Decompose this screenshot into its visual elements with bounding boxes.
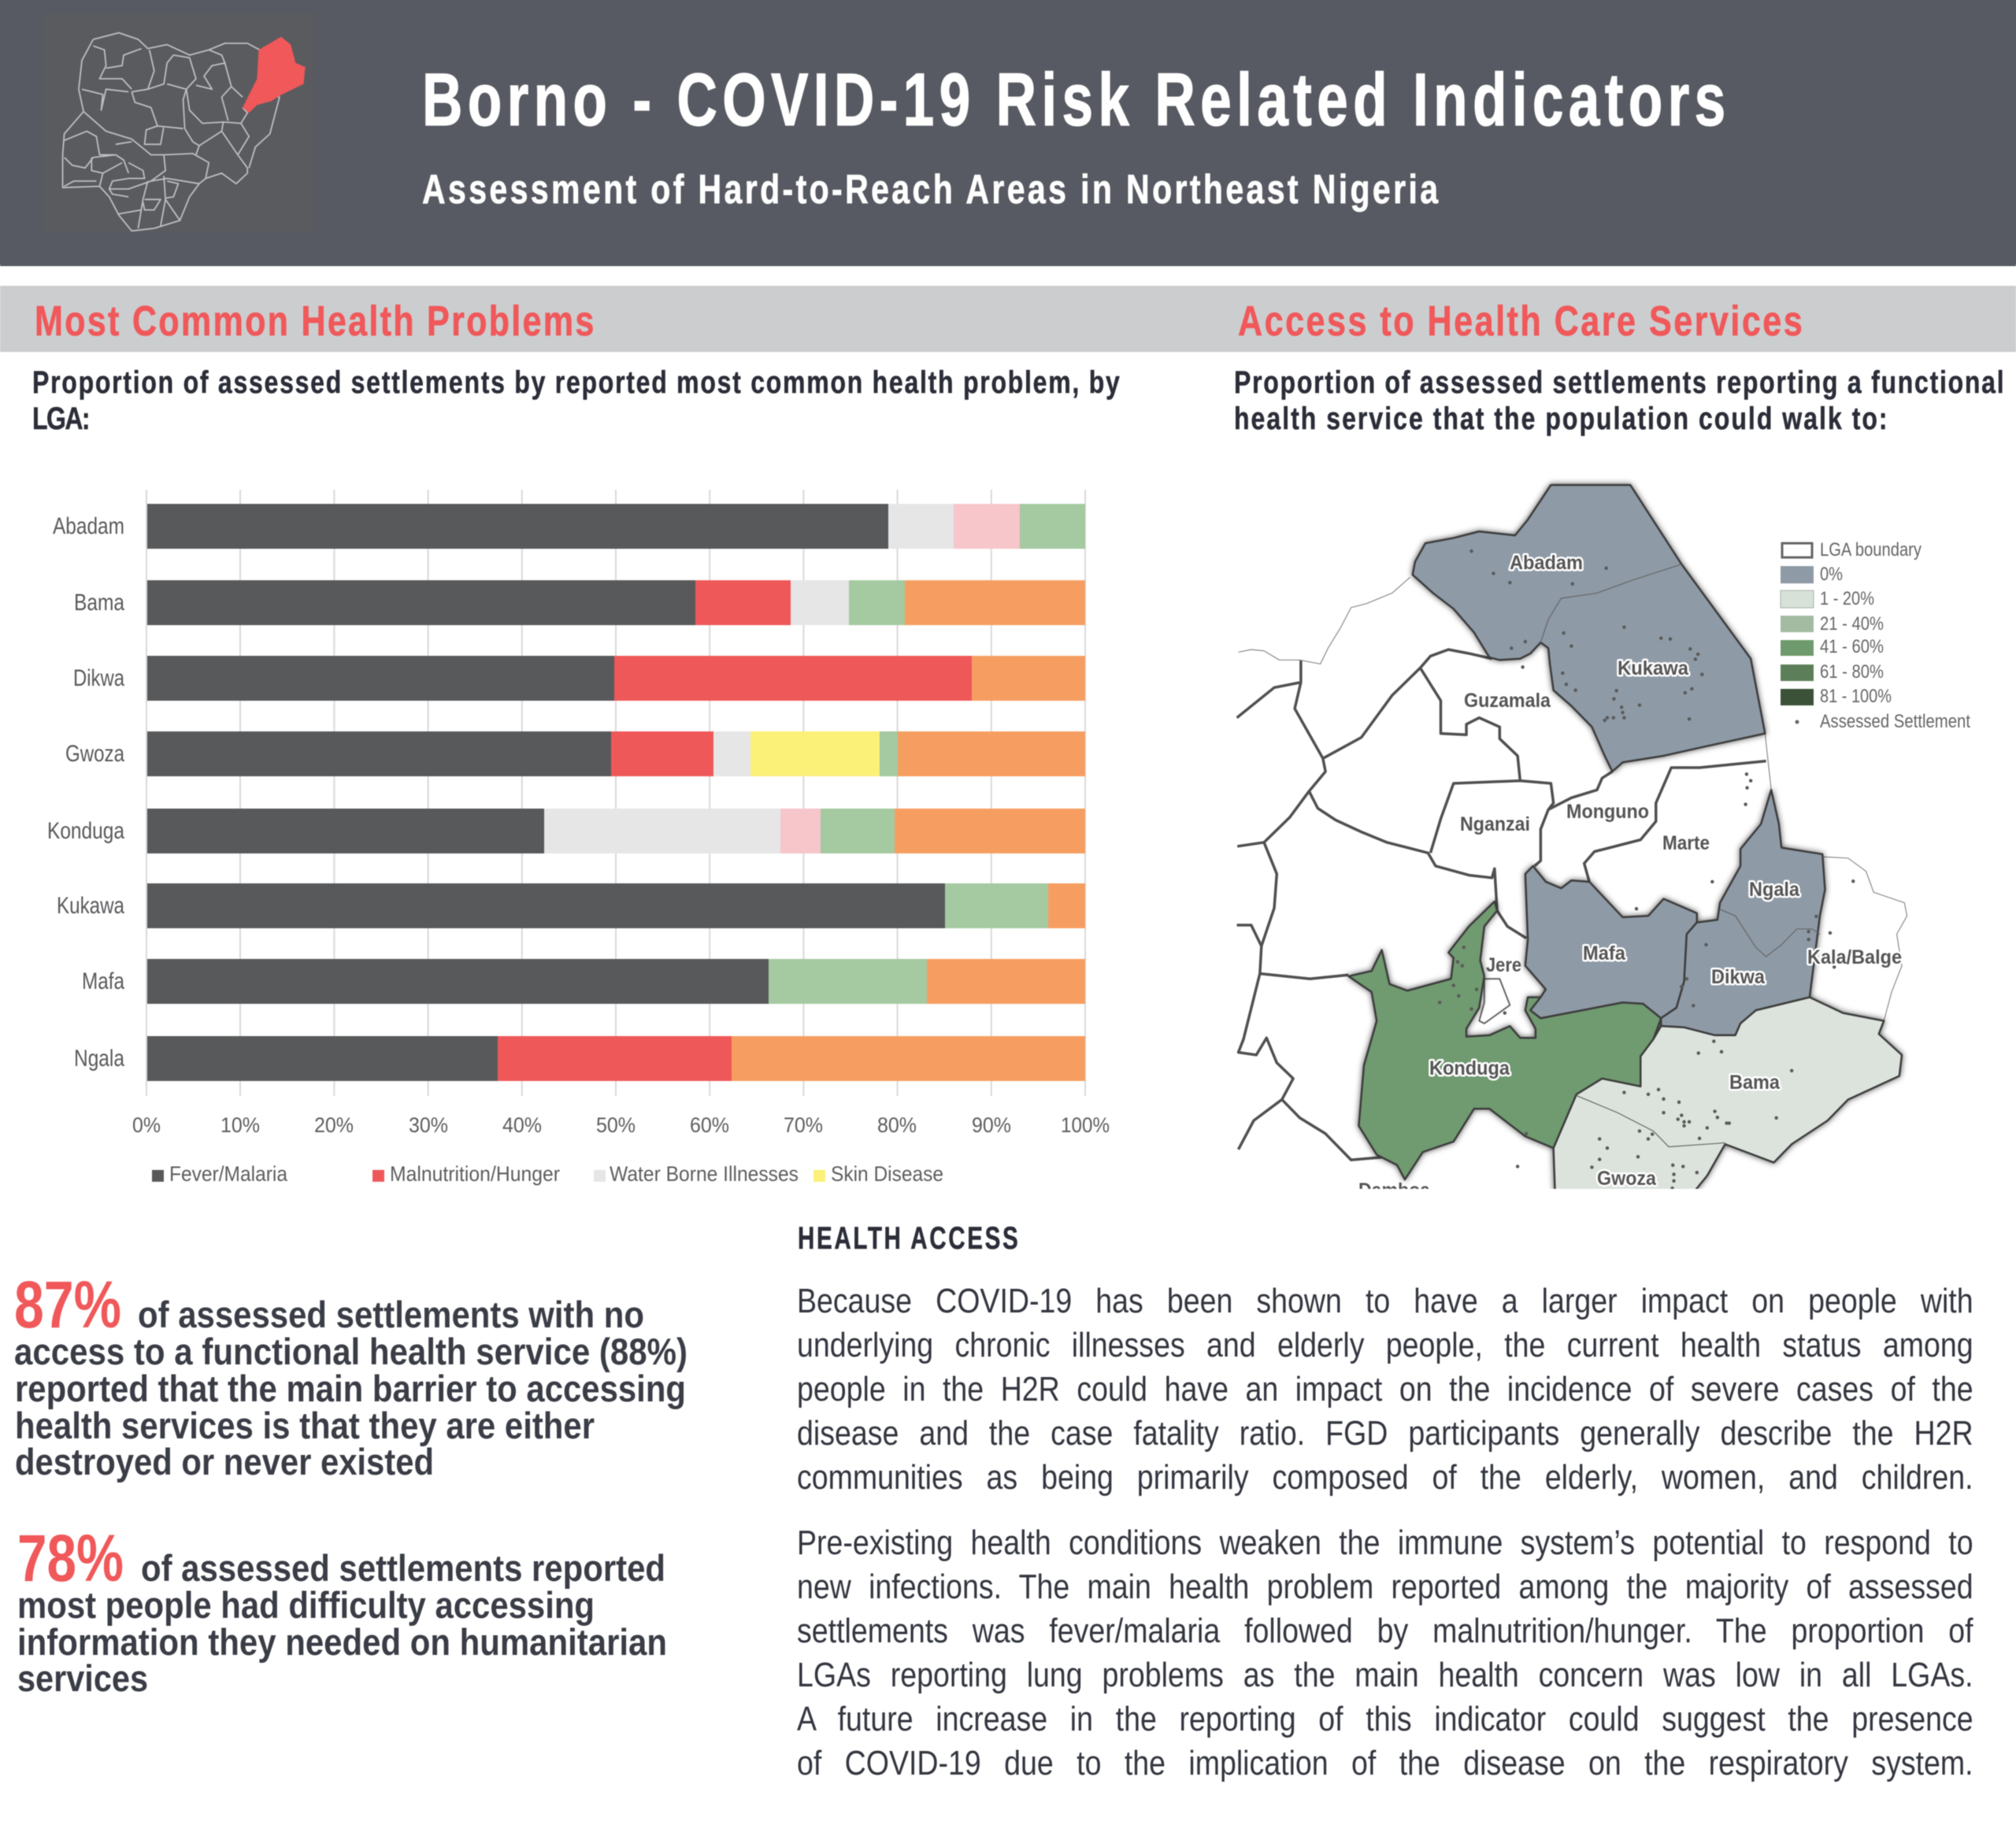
- callout: 78% statistic: information they needed on humanitarian: [17, 1621, 667, 1663]
- chart axis labels: 100%: [1061, 1113, 1110, 1137]
- chart axis labels: 80%: [877, 1113, 917, 1137]
- subtitle: Assessment of Hard-to-Reach Areas in Northeast Nigeria: [422, 166, 1439, 212]
- bar: Abadam: Abadam: [53, 513, 124, 539]
- LGA name labels: Guzamala: [1464, 690, 1551, 712]
- map legend: [1781, 539, 1970, 732]
- bar: Dikwa: [73, 656, 1085, 701]
- text block: health access paragraph 2: new infections. The main health problem reported among the majority of assessed: [797, 1568, 1973, 1606]
- LGA name labels: Konduga: [1429, 1057, 1510, 1079]
- LGA name labels: Kala/Balge: [1807, 946, 1902, 968]
- text block: health access paragraph 2: settlements was fever/malaria followed by malnutrition/hunger. The proportion of: [797, 1612, 1973, 1650]
- bar: Bama: [74, 580, 1085, 625]
- heading: health problems: Most Common Health Problems: [35, 298, 594, 345]
- chart legend: [152, 1162, 943, 1186]
- bar: Abadam: [53, 504, 1085, 549]
- bar: Mafa: [82, 959, 1085, 1004]
- callout: 87% statistic: 87%: [14, 1268, 121, 1342]
- panel: header banner: [0, 0, 2016, 266]
- callout: 87% statistic: of assessed settlements with no: [138, 1294, 644, 1335]
- text block: health access paragraph 1: disease and the case fatality ratio. FGD participants generally describe the H2R: [797, 1414, 1973, 1453]
- text block: health access paragraph 2: A future increase in the reporting of this indicator could suggest the presence: [797, 1700, 1973, 1738]
- LGA fills by access level: [1348, 485, 1902, 1191]
- map legend: LGA boundary: [1820, 539, 1922, 561]
- text block: chart description: [32, 365, 1120, 436]
- callout: 78% statistic: services: [17, 1657, 148, 1699]
- icon: Nigeria map with Borno highlighted: [63, 33, 306, 231]
- chart axis labels: 30%: [409, 1113, 448, 1137]
- map legend: 21 - 40%: [1820, 613, 1884, 635]
- text block: health access paragraph 2: [797, 1523, 1973, 1782]
- chart legend: Malnutrition/Hunger: [390, 1162, 560, 1186]
- bar: Gwoza: Gwoza: [65, 741, 124, 767]
- text block: health access paragraph 1: people in the H2R could have an impact on the incidence of severe cases of the: [797, 1370, 1973, 1409]
- text block: health access paragraph 1: communities as being primarily composed of the elderly, women, and children.: [797, 1458, 1973, 1497]
- text block: health access paragraph 1: underlying chronic illnesses and elderly people, the current health status among: [797, 1326, 1973, 1364]
- text block: health access paragraph 2: of COVID-19 due to the implication of the disease on the respiratory system.: [797, 1744, 1973, 1782]
- heading: health care access: Access to Health Care Services: [1238, 298, 1803, 345]
- LGA name labels: Ngala: [1749, 879, 1800, 901]
- chart axis labels: 0%: [132, 1113, 161, 1137]
- map legend: 61 - 80%: [1820, 661, 1884, 683]
- bar: Kukawa: Kukawa: [57, 893, 124, 919]
- LGA name labels: Jere: [1486, 954, 1521, 976]
- LGA name labels: Kukawa: [1618, 657, 1689, 679]
- bar: Gwoza: [65, 731, 1085, 776]
- callout: 78% statistic: 78%: [17, 1521, 124, 1595]
- bar: Konduga: [47, 809, 1085, 853]
- LGA name labels: Nganzai: [1460, 813, 1530, 835]
- bar: Dikwa: Dikwa: [73, 665, 124, 691]
- bar: Ngala: Ngala: [74, 1046, 124, 1072]
- region: Bama and Gwoza 1-20%: [1554, 998, 1902, 1191]
- callout: 87% statistic: reported that the main barrier to accessing: [15, 1368, 686, 1409]
- text block: health access paragraph 2: LGAs reporting lung problems as the main health concern was low in all LGAs.: [797, 1656, 1973, 1694]
- text block: map description: health service that the population could walk to:: [1234, 401, 1888, 436]
- LGA name labels: Gwoza: [1597, 1168, 1657, 1190]
- map legend: 41 - 60%: [1820, 636, 1884, 657]
- LGA name labels: Damboa: [1358, 1179, 1431, 1201]
- chart legend: Fever/Malaria: [169, 1162, 288, 1186]
- LGA name labels: Abadam: [1510, 552, 1583, 574]
- text block: health access paragraph 2: Pre-existing health conditions weaken the immune system’s potential to respond to: [797, 1523, 1973, 1562]
- chart axis labels: 90%: [972, 1113, 1011, 1137]
- text block: chart description: Proportion of assessed settlements by reported most common health problem, by: [32, 365, 1120, 400]
- map legend: 81 - 100%: [1820, 686, 1892, 707]
- title: Borno - COVID-19 Risk Related Indicators: [422, 57, 1725, 141]
- map legend: Assessed Settlement: [1820, 711, 1970, 732]
- LGA name labels: [1358, 552, 1902, 1201]
- bar chart: health problems by LGA: [47, 490, 1110, 1186]
- callout: 78% statistic: most people had difficulty accessing: [17, 1584, 595, 1626]
- chart legend: Water Borne Illnesses: [610, 1162, 799, 1186]
- LGA name labels: Bama: [1729, 1072, 1781, 1094]
- text block: map description: Proportion of assessed settlements reporting a functional: [1234, 365, 2004, 400]
- chart axis labels: [132, 1113, 1110, 1137]
- region: Abadam and Kukawa 0%: [1413, 485, 1765, 772]
- LGA name labels: Marte: [1662, 832, 1710, 854]
- text block: chart description: LGA:: [32, 401, 91, 436]
- region: Mafa 0%: [1525, 866, 1697, 1018]
- text block: map description: [1234, 365, 2004, 436]
- internal LGA dividers and assessed settlement dots: [1440, 551, 1853, 1188]
- chart legend: Skin Disease: [831, 1162, 943, 1186]
- callout: 87% statistic: access to a functional health service (88%): [14, 1331, 687, 1372]
- region: Konduga 41-60%: [1348, 901, 1661, 1179]
- bar: Bama: Bama: [74, 590, 124, 616]
- map legend: 1 - 20%: [1820, 588, 1874, 609]
- chart axis labels: 10%: [220, 1113, 260, 1137]
- region: Dikwa and Ngala 0%: [1661, 790, 1825, 1035]
- heading: health access: HEALTH ACCESS: [798, 1221, 1018, 1256]
- text block: health access paragraph 1: [797, 1282, 1973, 1497]
- LGA boundary lines: [1237, 577, 1907, 1160]
- panel: section heading band: [0, 286, 2016, 352]
- chart axis labels: 60%: [690, 1113, 729, 1137]
- chart axis labels: 70%: [784, 1113, 823, 1137]
- bar: Mafa: Mafa: [82, 968, 124, 994]
- bar: Konduga: Konduga: [47, 818, 124, 844]
- LGA name labels: Dikwa: [1711, 966, 1766, 988]
- callout: 87% statistic: health services is that they are either: [15, 1405, 595, 1446]
- chart axis labels: 40%: [502, 1113, 542, 1137]
- text block: health access paragraph 1: Because COVID-19 has been shown to have a larger impact on people with: [797, 1282, 1973, 1320]
- chart axis labels: 20%: [314, 1113, 354, 1137]
- map legend: 0%: [1820, 564, 1843, 585]
- LGA name labels: Monguno: [1566, 801, 1649, 823]
- callout: 78% statistic: of assessed settlements reported: [141, 1547, 665, 1589]
- callout: 87% statistic: [14, 1268, 687, 1483]
- bar: Kukawa: [57, 883, 1085, 928]
- LGA name labels: Mafa: [1583, 942, 1626, 964]
- choropleth map: Borno LGAs: [1237, 485, 1907, 1201]
- callout: 78% statistic: [17, 1521, 667, 1699]
- callout: 87% statistic: destroyed or never existed: [15, 1441, 434, 1483]
- chart axis labels: 50%: [596, 1113, 636, 1137]
- bar: Ngala: [74, 1036, 1085, 1081]
